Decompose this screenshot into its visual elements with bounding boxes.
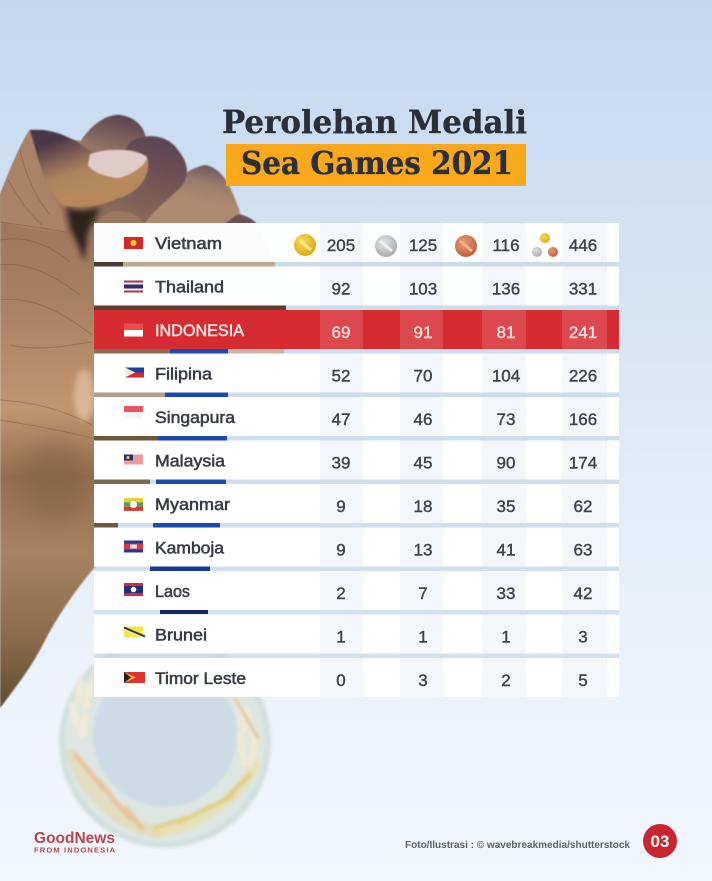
row: Filipina: Filipina <box>155 366 213 384</box>
flag: Thailand <box>124 280 143 292</box>
row: Timor Leste: 0 <box>336 671 346 690</box>
row: Thailand: 136 <box>492 280 520 298</box>
shaded patch on forearm <box>21 440 89 520</box>
dark crease between thumb and palm <box>66 207 100 262</box>
title line 1: Perolehan Medali <box>222 103 527 141</box>
row: Myanmar: 35 <box>497 497 515 516</box>
row: Timor Leste: 5 <box>578 671 588 690</box>
row: Indonesia (highlighted) <box>94 310 619 349</box>
row: Singapura: 73 <box>497 410 515 429</box>
row: Myanmar: 18 <box>414 497 432 516</box>
row: Kamboja: 63 <box>574 540 592 560</box>
row: Filipina: 104 <box>492 366 520 386</box>
logo: GoodNews from Indonesia: FROM INDONESIA <box>34 846 116 854</box>
row: Myanmar: 9 <box>336 497 346 516</box>
row: Vietnam: 446 <box>569 236 597 255</box>
row: Myanmar <box>94 484 619 523</box>
row: Singapura: 47 <box>332 410 350 429</box>
flag: Singapura <box>124 406 143 418</box>
thumbnail <box>88 150 147 178</box>
row: Laos: 33 <box>497 584 515 603</box>
wrinkles <box>0 150 92 438</box>
row: Filipina: 52 <box>332 366 350 386</box>
row: Laos: 42 <box>574 584 592 603</box>
row: Laos: 7 <box>418 584 428 603</box>
row: Brunei: 1 <box>501 628 511 646</box>
icon: all medals <box>532 233 558 257</box>
row: Vietnam: Vietnam <box>155 235 222 253</box>
title <box>222 103 527 186</box>
ring finger <box>143 165 240 226</box>
row: Filipina: 226 <box>569 366 597 386</box>
row: Thailand: 103 <box>409 280 437 298</box>
thumb <box>30 130 148 207</box>
knuckle folds <box>0 130 65 232</box>
row: Indonesia (highlighted): 91 <box>414 323 432 342</box>
row: Brunei: 1 <box>418 628 428 646</box>
flag: Kamboja <box>124 540 143 552</box>
row: Thailand <box>94 266 619 306</box>
flag: Timor Leste <box>124 672 145 683</box>
hand seen through the row gaps <box>94 262 286 528</box>
forearm and palm <box>0 130 276 708</box>
row: Brunei: 3 <box>578 628 588 646</box>
finger behind the thumb <box>78 115 146 172</box>
row: Brunei: Brunei <box>155 626 207 644</box>
row: Malaysia: 45 <box>414 454 432 472</box>
row: Myanmar: 62 <box>574 497 592 516</box>
row: Vietnam: 116 <box>492 236 520 255</box>
row: Vietnam: 205 <box>327 236 355 255</box>
row: Vietnam <box>94 223 619 262</box>
row: Timor Leste <box>94 658 619 697</box>
page number badge: 03 <box>651 832 669 851</box>
highlight bar <box>226 144 526 186</box>
row: Laos: Laos <box>155 583 190 601</box>
row: Indonesia (highlighted): 241 <box>569 323 597 342</box>
middle finger <box>82 136 187 226</box>
row: Thailand: Thailand <box>155 278 224 296</box>
row: Singapura: Singapura <box>155 409 236 427</box>
icon: silver medal <box>375 235 397 257</box>
lower knuckle mass under fingers <box>84 211 145 262</box>
little finger <box>218 215 257 226</box>
row: Laos: 2 <box>336 584 346 603</box>
raised fist and forearm <box>0 115 286 708</box>
flag: Indonesia <box>124 324 143 336</box>
flag: Brunei <box>124 626 145 638</box>
row: Kamboja: 13 <box>414 540 432 560</box>
row: Brunei: 1 <box>336 628 346 646</box>
flag: Filipina <box>125 368 144 378</box>
row: Singapura: 46 <box>414 410 432 429</box>
icon: gold medal <box>294 234 316 256</box>
highlight at wrist <box>74 369 94 421</box>
medal table <box>94 223 619 697</box>
blue shirt showing between rows <box>150 349 228 614</box>
row: Kamboja: 41 <box>497 540 515 560</box>
title line 2: Sea Games 2021 <box>241 144 513 182</box>
row: Malaysia: 90 <box>497 454 515 472</box>
row: Timor Leste: Timor Leste <box>155 670 246 688</box>
flag: Malaysia <box>124 454 143 464</box>
row: Malaysia: Malaysia <box>155 452 226 470</box>
row: Timor Leste: 2 <box>501 671 511 690</box>
row: Thailand: 92 <box>332 280 350 298</box>
logo: GoodNews from Indonesia <box>34 830 116 854</box>
photo credit: Foto/Ilustrasi : © wavebreakmedia/shutterstock <box>405 840 630 851</box>
row: Malaysia: 39 <box>332 454 350 472</box>
row: Myanmar: Myanmar <box>155 496 231 514</box>
medal held below the fist <box>59 636 271 848</box>
row: Singapura <box>94 397 619 436</box>
row: Timor Leste: 3 <box>418 671 428 690</box>
logo: GoodNews from Indonesia: GoodNews <box>34 830 115 847</box>
row: Kamboja <box>94 528 619 566</box>
row: Laos <box>94 571 619 610</box>
row: Singapura: 166 <box>569 410 597 429</box>
row: Malaysia <box>94 440 619 480</box>
icon: bronze medal <box>455 235 477 257</box>
row: Filipina: 70 <box>414 366 432 386</box>
page number badge <box>643 824 677 858</box>
row: Filipina <box>94 354 619 392</box>
row: Vietnam: 125 <box>409 236 437 255</box>
flag: Myanmar <box>124 498 143 511</box>
flag: Laos <box>124 583 143 596</box>
pale strips between table rows <box>94 262 619 658</box>
row: Indonesia (highlighted): INDONESIA <box>155 322 244 340</box>
row: Kamboja: 9 <box>336 540 346 560</box>
row: Indonesia (highlighted): 69 <box>332 323 350 342</box>
row: Malaysia: 174 <box>569 454 597 472</box>
flag: Vietnam <box>124 237 143 249</box>
row: Indonesia (highlighted): 81 <box>497 323 515 342</box>
row: Brunei <box>94 614 619 654</box>
row: Thailand: 331 <box>569 280 597 298</box>
row: Kamboja: Kamboja <box>155 540 225 558</box>
